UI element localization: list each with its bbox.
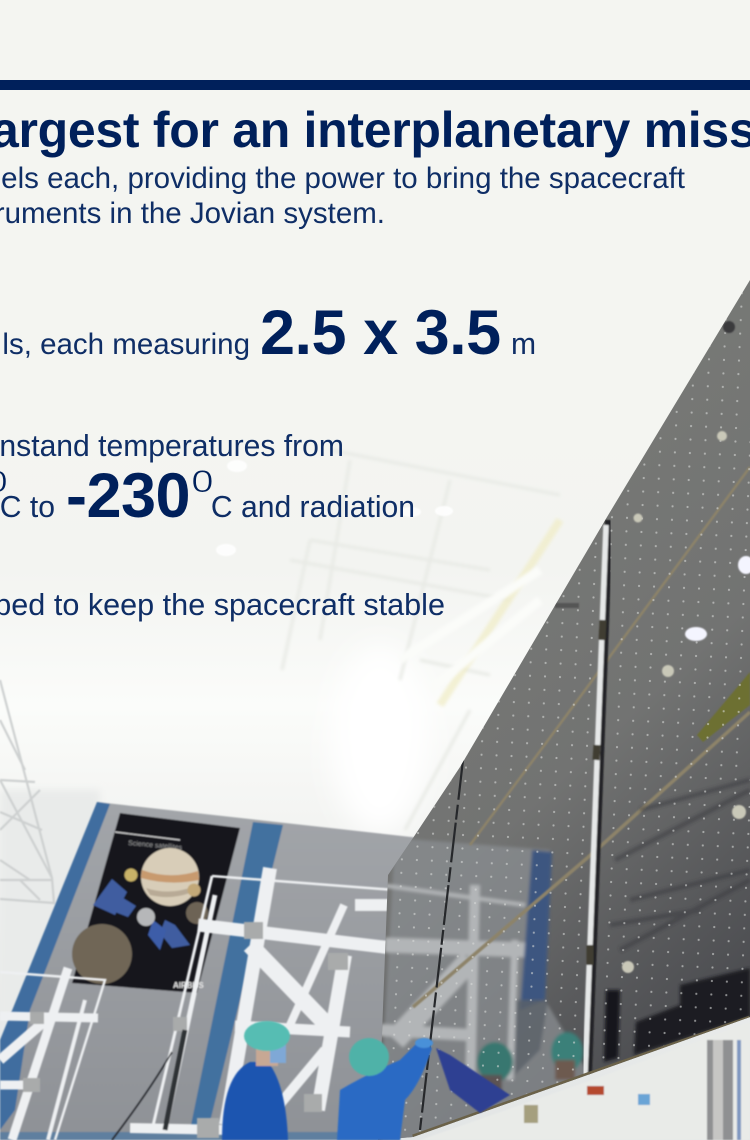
intro paragraph: ruments in the Jovian system. <box>0 197 385 230</box>
icon: spacecraft with solar wings <box>93 879 190 950</box>
stat: panel size: ls, each measuring <box>2 328 250 361</box>
left support frame <box>0 968 105 1140</box>
centre blue strip <box>190 822 283 1130</box>
stat: temperature range <box>0 430 415 531</box>
poster: mission illustration: Science satellites <box>128 840 183 852</box>
icon: moons <box>72 868 208 984</box>
stability note: ped to keep the spacecraft stable <box>0 588 445 622</box>
black cable <box>112 1052 172 1140</box>
poster: mission illustration <box>72 813 240 993</box>
thin dark vertical cable <box>420 760 463 1130</box>
panel hinge mounts <box>555 321 746 973</box>
person centre, arm raised <box>337 1038 433 1140</box>
intro paragraph <box>0 162 685 230</box>
reflected arm <box>436 1048 510 1113</box>
glare spots <box>685 556 750 641</box>
person left <box>222 1021 290 1140</box>
solar array panel <box>370 270 750 1140</box>
white dot grid <box>370 270 750 1140</box>
diagonal wiring lines <box>413 467 750 1007</box>
stat: temperature range: -230 <box>66 461 190 531</box>
stat: panel size: 2.5 x 3.5 <box>260 298 501 368</box>
photo: white support frames <box>0 868 395 1140</box>
vertical white spar <box>585 520 609 1075</box>
stat: temperature range: C to <box>0 491 55 524</box>
intro paragraph: els each, providing the power to bring the spacecraft <box>1 162 685 195</box>
top rule <box>0 80 750 90</box>
left blue strip <box>0 802 110 1130</box>
panel bottom edge <box>413 1018 750 1137</box>
icon: Jupiter <box>141 848 199 906</box>
wall reflection in panel <box>378 838 590 1140</box>
floor area under panel <box>420 1022 750 1140</box>
poster: mission illustration: AIRBUS <box>173 981 204 990</box>
dark mottled lower-right cells <box>604 780 750 1062</box>
stat: temperature range: o <box>191 455 214 501</box>
heading text: argest for an interplanetary miss <box>0 102 750 158</box>
right support frame <box>130 868 395 1130</box>
moss-green patch <box>697 672 750 742</box>
stat: temperature range: C and radiation <box>211 491 415 524</box>
people in clean-room gowns <box>222 1021 510 1140</box>
truss structure on the left <box>0 680 54 903</box>
stat: panel size <box>2 298 536 368</box>
stat: panel size: m <box>511 328 536 361</box>
frame mounting nodes <box>23 922 348 1138</box>
stat: temperature range: nstand temperatures from <box>0 430 344 463</box>
photo: wall with blue strips <box>0 802 420 1140</box>
